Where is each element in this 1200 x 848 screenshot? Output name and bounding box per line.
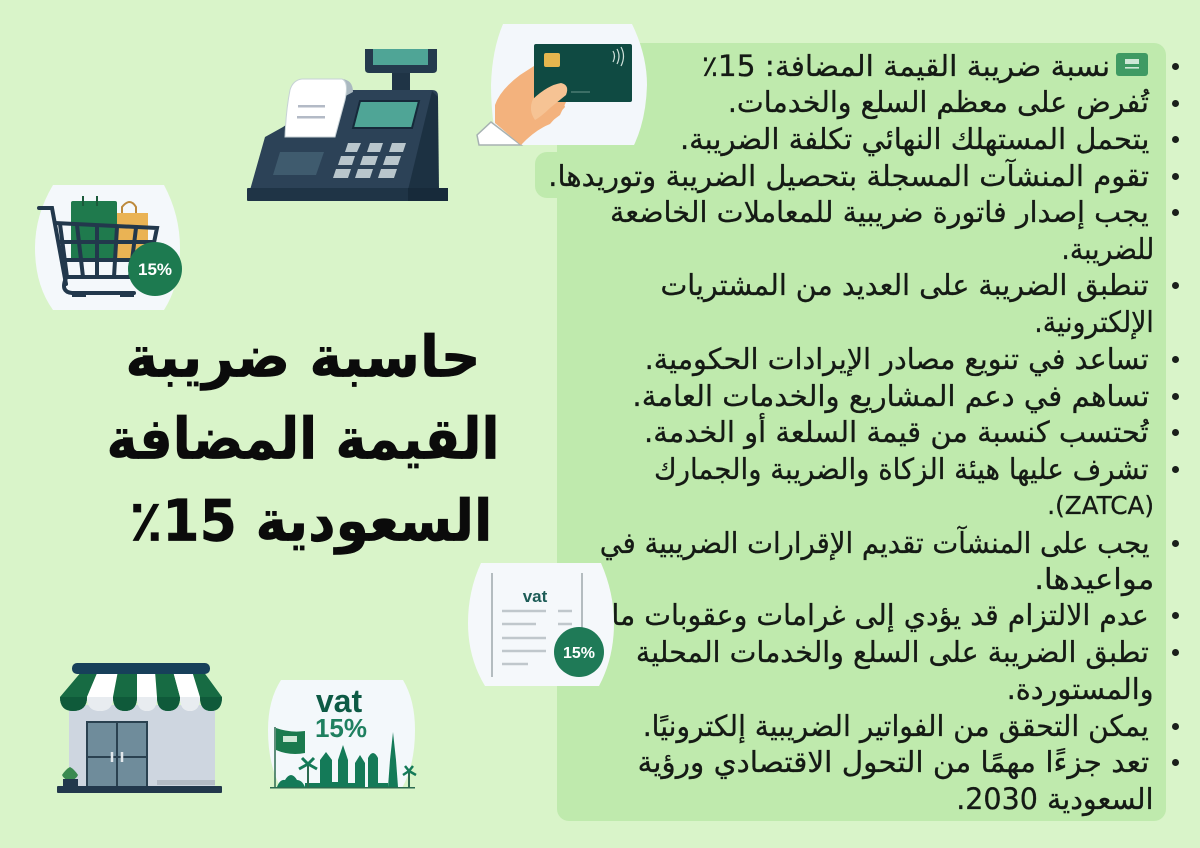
list item: تنطبق الضريبة على العديد من المشتريات (661, 268, 1149, 302)
list item: تُفرض على معظم السلع والخدمات. (728, 85, 1149, 119)
list item: يجب إصدار فاتورة ضريبية للمعاملات الخاضعة (610, 195, 1149, 229)
title (107, 325, 499, 555)
list item: تساهم في دعم المشاريع والخدمات العامة. (632, 379, 1149, 413)
list item: تقوم المنشآت المسجلة بتحصيل الضريبة وتوريدها. (548, 159, 1149, 193)
icon: storefront (57, 663, 222, 793)
icon: VAT invoice with 15% badge: vat (523, 587, 548, 606)
list item continuation: السعودية 2030. (957, 782, 1154, 816)
list item continuation: الإلكترونية. (1034, 305, 1154, 339)
list item continuation: (ZATCA). (1047, 491, 1154, 520)
icon: VAT invoice with 15% badge (468, 563, 614, 686)
icon: Saudi flag (1116, 53, 1148, 76)
list item continuation: للضريبة. (1061, 232, 1154, 266)
list item: يجب على المنشآت تقديم الإقرارات الضريبية في (599, 526, 1149, 560)
list item continuation: والمستوردة. (1007, 672, 1154, 706)
list item: تعد جزءًا مهمًا من التحول الاقتصادي ورؤية (637, 745, 1149, 779)
list item: تُحتسب كنسبة من قيمة السلعة أو الخدمة. (644, 415, 1149, 449)
list item: عدم الالتزام قد يؤدي إلى غرامات وعقوبات مالية. (570, 598, 1149, 632)
icon: VAT 15% skyline with flag: 15% (315, 713, 367, 743)
list item continuation: مواعيدها. (1034, 562, 1154, 596)
icon: VAT 15% skyline with flag (268, 680, 417, 788)
panel: text background (535, 43, 1166, 821)
icon: hand holding card (476, 24, 647, 146)
title: السعودية 15٪ (130, 489, 492, 555)
icon: cash register (247, 49, 448, 201)
icon: VAT invoice with 15% badge: 15% (563, 645, 595, 662)
list item: VAT rate: نسبة ضريبة القيمة المضافة: 15٪ (702, 49, 1110, 83)
list item: تشرف عليها هيئة الزكاة والضريبة والجمارك (654, 452, 1149, 486)
title: حاسبة ضريبة (125, 325, 481, 391)
icon: shopping cart with 15% badge: 15% (138, 260, 172, 279)
icon: shopping cart with 15% badge (35, 185, 182, 310)
icon: VAT 15% skyline with flag: vat (316, 683, 362, 719)
list item: يتحمل المستهلك النهائي تكلفة الضريبة. (679, 122, 1149, 156)
list item: تساعد في تنويع مصادر الإيرادات الحكومية. (645, 342, 1149, 376)
list item: يمكن التحقق من الفواتير الضريبية إلكترونيًا. (643, 709, 1149, 743)
title: القيمة المضافة (107, 407, 499, 473)
list item: تطبق الضريبة على السلع والخدمات المحلية (636, 635, 1149, 669)
